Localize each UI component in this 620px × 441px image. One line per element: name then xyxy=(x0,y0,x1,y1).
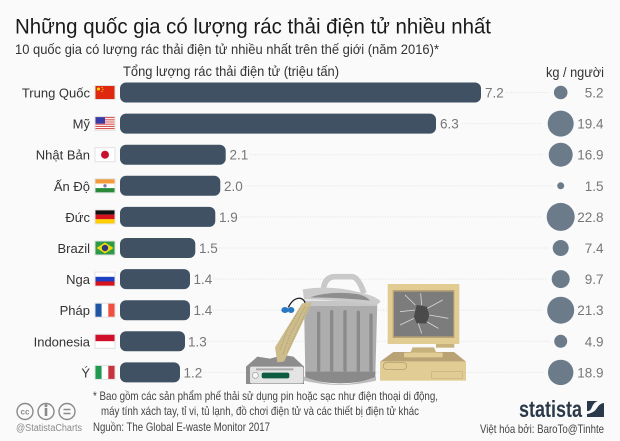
icon: trash can xyxy=(303,277,381,385)
icon: creative commons badges: cc xyxy=(21,408,30,416)
row: Nhật Bản: Nhật Bản xyxy=(36,148,90,163)
row: Ấn Độ: 1.5 xyxy=(585,179,604,194)
row: Trung Quốc: 5.2 xyxy=(585,86,604,100)
row: Indonesia xyxy=(34,331,604,351)
flag: Russia xyxy=(95,272,115,286)
row: Brazil xyxy=(57,238,604,258)
row: Ý: 1.2 xyxy=(184,365,202,380)
row: Trung Quốc: Trung Quốc xyxy=(22,86,90,100)
row: Ấn Độ: Ấn Độ xyxy=(54,179,90,194)
row: Indonesia: 4.9 xyxy=(585,334,604,349)
row: Ý xyxy=(81,360,604,385)
row: Ý: 18.9 xyxy=(577,365,604,380)
icon: keyboard xyxy=(275,302,312,362)
row: Pháp xyxy=(60,297,604,324)
row: Trung Quốc xyxy=(22,82,604,102)
row: Indonesia: Indonesia xyxy=(34,334,91,349)
flag: Italy xyxy=(95,365,115,379)
logo: statista: statista xyxy=(519,396,582,422)
icon: creative commons badges xyxy=(17,404,75,420)
credit handle: @StatistaCharts xyxy=(16,423,82,434)
flag: Germany xyxy=(95,210,115,224)
subtitle: 10 quốc gia có lượng rác thải điện tử nhiều nhất trên thế giới (năm 2016)* xyxy=(15,41,439,57)
row: Nga: 9.7 xyxy=(585,272,604,287)
row: Nga xyxy=(66,269,604,289)
flag: Japan xyxy=(95,148,115,162)
row: Nhật Bản: 16.9 xyxy=(577,148,604,163)
row: Mỹ: 19.4 xyxy=(577,117,604,132)
icon: cable and plug xyxy=(281,298,305,313)
title: Những quốc gia có lượng rác thải điện tử nhiều nhất xyxy=(15,16,491,38)
flag: France xyxy=(95,303,115,317)
row: Đức xyxy=(65,203,604,231)
row: Pháp: 1.4 xyxy=(194,303,213,318)
flag: Brazil xyxy=(95,241,115,255)
row: Mỹ xyxy=(73,111,604,137)
row: Đức: Đức xyxy=(65,210,90,225)
row: Ý: Ý xyxy=(81,365,90,380)
chart heading: total e-waste: Tổng lượng rác thải điện tử (triệu tấn) xyxy=(123,63,339,79)
leader lines xyxy=(203,92,553,372)
row: Pháp: Pháp xyxy=(60,303,90,318)
source: Nguồn: The Global E-waste Monitor 2017 xyxy=(93,420,270,434)
row: Mỹ: 6.3 xyxy=(440,117,459,132)
row: Indonesia: 1.3 xyxy=(188,334,207,349)
row: Nhật Bản: 2.1 xyxy=(230,148,248,163)
footnote xyxy=(93,389,438,418)
flag: China xyxy=(95,86,115,100)
row: Brazil: 1.5 xyxy=(199,241,218,256)
row: Ấn Độ xyxy=(54,176,604,196)
row: Đức: 1.9 xyxy=(219,210,238,225)
row: Nga: Nga xyxy=(66,272,91,287)
flag: India xyxy=(95,179,115,193)
icon: broken computer xyxy=(380,284,466,381)
row: Nhật Bản xyxy=(36,143,604,167)
row: Nga: 1.4 xyxy=(194,272,213,287)
row: Pháp: 21.3 xyxy=(577,303,604,318)
row: Trung Quốc: 7.2 xyxy=(485,86,504,100)
row: Ấn Độ: 2.0 xyxy=(224,179,243,194)
footnote: * Bao gồm các sản phẩm phế thải sử dụng pin hoặc sạc như điện thoại di động, xyxy=(93,389,438,403)
icon: statista mark xyxy=(587,401,604,417)
row: Mỹ: Mỹ xyxy=(73,117,90,132)
row: Đức: 22.8 xyxy=(577,210,604,225)
row: Brazil: 7.4 xyxy=(585,241,604,256)
flag: USA xyxy=(95,117,115,131)
footnote: máy tính xách tay, tỉ vi, tủ lạnh, đồ chơi điện tử và các thiết bị điện tử khác xyxy=(101,404,419,418)
row: Brazil: Brazil xyxy=(57,241,90,256)
chart heading: kg per person: kg / người xyxy=(546,64,604,80)
icon: router box xyxy=(246,355,304,384)
flag: Indonesia xyxy=(95,334,115,348)
illustration: e-waste pile xyxy=(246,277,466,385)
